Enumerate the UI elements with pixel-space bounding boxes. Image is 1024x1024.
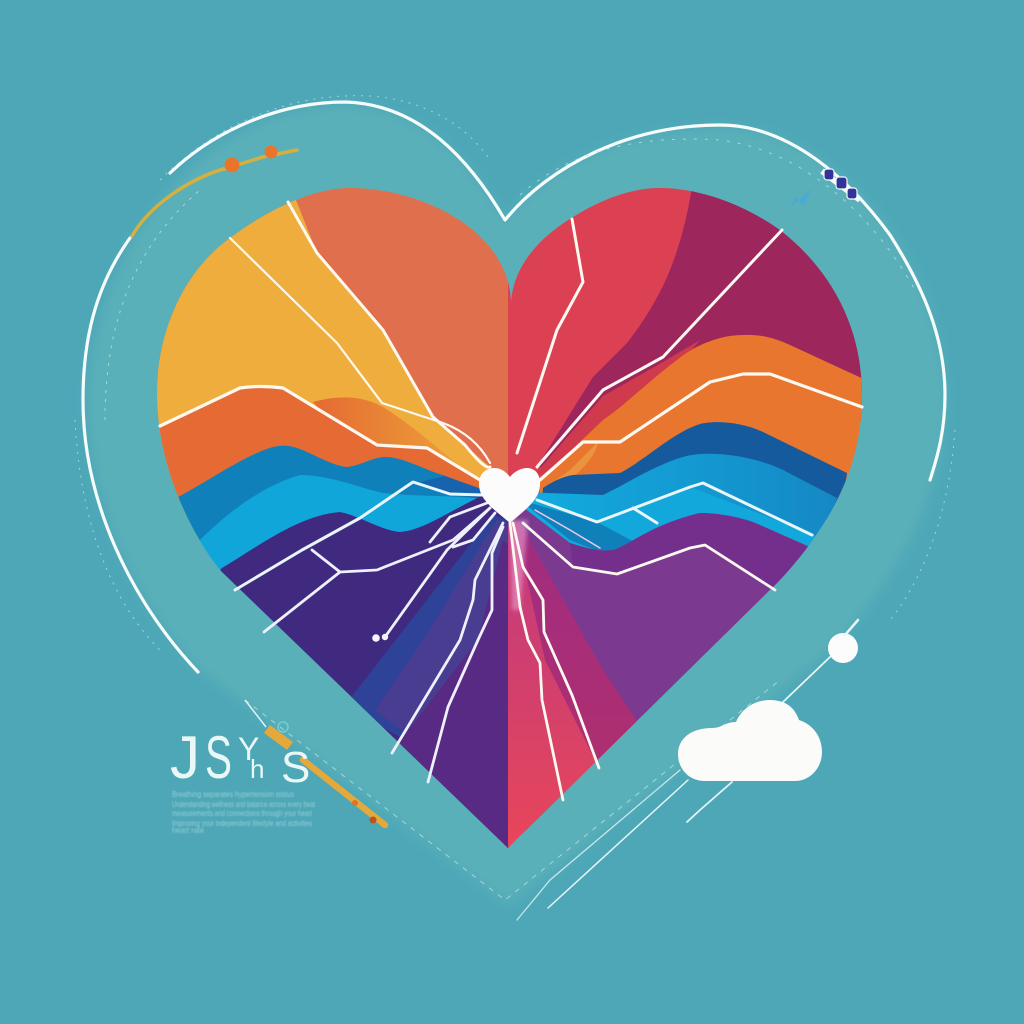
description text: measurements and connections through your heart (172, 809, 313, 818)
lower-left lines (264, 503, 503, 782)
description text: Breathing separates hypertension status (172, 790, 294, 799)
node 2 (264, 146, 278, 158)
title letters: Y (238, 731, 259, 767)
red bottom wedge (508, 525, 599, 850)
line end dots (372, 634, 388, 642)
description text: heart rate (172, 826, 204, 835)
icon: blue arrow (790, 188, 812, 208)
left outline segment (83, 238, 198, 672)
description text: Improving your independent lifestyle and activities (172, 819, 312, 828)
cyan band lines (235, 482, 812, 590)
outer heart outline (83, 102, 945, 672)
red top-right segment (508, 180, 698, 500)
dark blue inner wedge (420, 476, 481, 498)
cyan lower wedge (599, 488, 815, 547)
maroon segment (537, 180, 870, 470)
yellow segment (157, 200, 490, 520)
title last letter: S (281, 743, 310, 792)
yellow arc with orange nodes (132, 146, 297, 236)
circle node (828, 633, 858, 663)
dark purple lower left (220, 496, 510, 848)
upper-right lines (517, 219, 862, 480)
node 1 (224, 158, 240, 172)
yellow stick (245, 700, 385, 825)
pink glow rays (510, 520, 528, 610)
dark blue right band (540, 422, 847, 520)
purple wedge (400, 540, 508, 848)
connector lines near cloud (517, 620, 858, 920)
connecting white lines (160, 202, 862, 800)
red strip (530, 340, 700, 480)
blue left band (178, 446, 477, 560)
description text (172, 790, 316, 835)
orange inner blob (313, 397, 458, 464)
lighter heart halo (88, 106, 945, 905)
lower blue wedge (528, 504, 632, 550)
indigo wedge (352, 516, 508, 737)
title letters lower: h (250, 754, 264, 784)
top outline segment (170, 102, 945, 480)
orange left band (150, 386, 490, 520)
cyan left band (200, 475, 476, 587)
darker purple above line (570, 513, 810, 590)
orange highlight (540, 442, 598, 492)
description text: Understanding wellness and balance across every beat (172, 800, 316, 809)
blue right band (526, 454, 837, 550)
center white heart (479, 468, 540, 523)
title: J (170, 724, 200, 791)
lower-right lines (510, 510, 775, 800)
dashed decorative dots (75, 96, 955, 900)
orange right band (540, 335, 870, 500)
main heart (150, 180, 870, 860)
magenta wedge (510, 520, 645, 830)
title second letter: S (205, 724, 232, 791)
cloud (678, 700, 822, 781)
purple right (508, 509, 808, 760)
salmon top-left segment (150, 180, 512, 510)
icon: satellite (822, 169, 860, 200)
violet wedge (375, 520, 508, 732)
upper-left lines (160, 202, 490, 480)
